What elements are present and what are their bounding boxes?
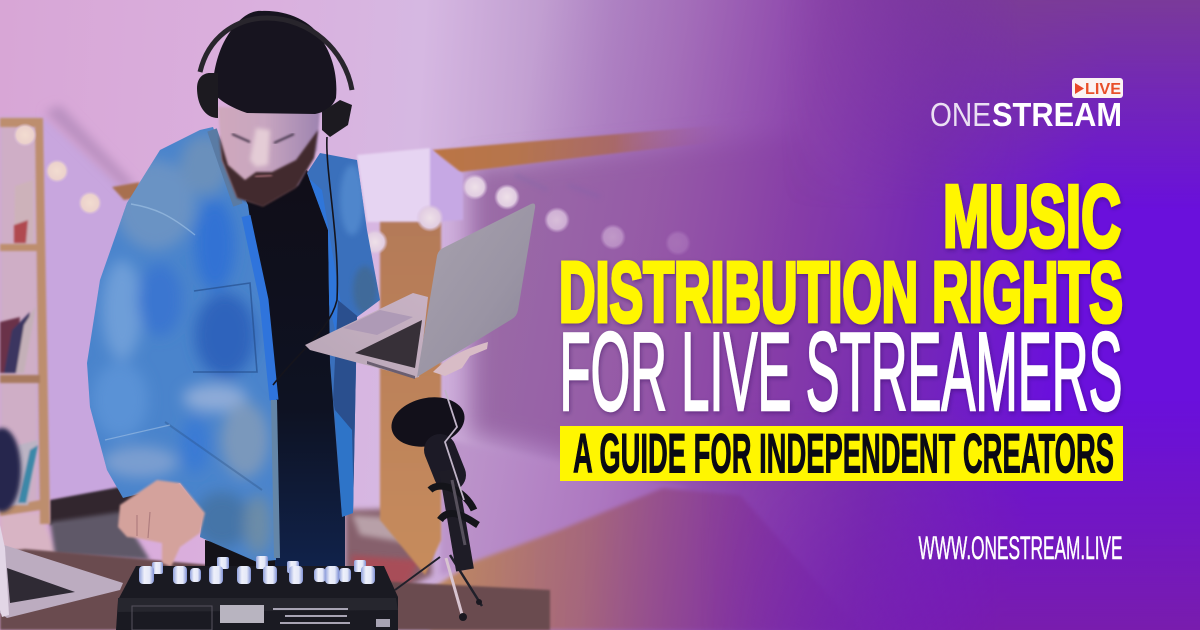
black t-shirt [240,170,345,567]
wooden bookshelf [0,118,50,524]
hand holding laptop [433,342,488,376]
room walls and bed [0,105,900,630]
logo: OneStream Live [930,78,1123,133]
denim jacket right panel [307,153,380,517]
logo: OneStream Live: STREAM [992,96,1122,133]
hand on the mixer [118,480,205,567]
dark round object on the shelf [0,428,21,512]
logo: OneStream Live: ONE [930,96,991,133]
mixer knobs [139,556,375,584]
headphone cable [273,137,337,385]
face and beard [218,107,320,207]
beanie [213,11,336,114]
denim jacket left panel [80,125,280,570]
shirt placket [212,130,277,558]
headphones [197,18,352,137]
string lights [13,123,691,256]
purple gradient overlay [487,0,1200,630]
wooden post [380,222,441,575]
logo: OneStream Live: LIVE [1085,81,1121,98]
microphone with pop filter and tripod [387,390,482,621]
wooden table [0,549,550,630]
small laptop on the table [0,525,123,618]
photo subject: man with headphones [80,11,535,570]
audio mixer [116,556,398,630]
white box on the beam [357,148,463,222]
held laptop [305,204,535,379]
wooden ceiling beam [432,124,735,173]
